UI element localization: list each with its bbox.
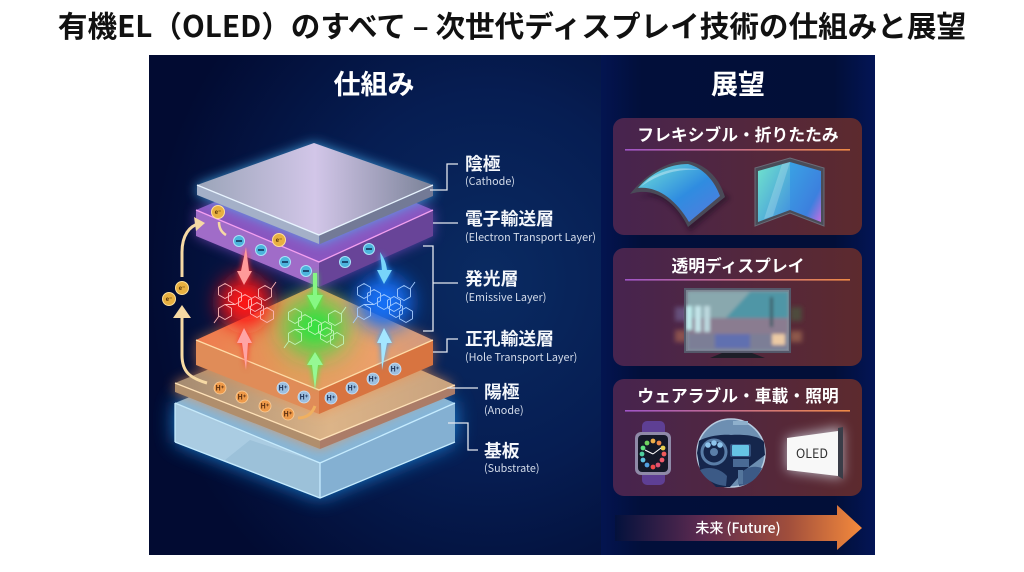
icon: car dashboard	[697, 419, 765, 487]
card heading: 透明ディスプレイ	[671, 253, 805, 277]
arrow: future: 未来 (Future)	[695, 518, 781, 538]
arrow: green up	[307, 352, 323, 390]
label: anode: 陽極	[484, 378, 520, 404]
icon: OLED lighting panel	[787, 427, 843, 479]
panel: outlook background	[601, 55, 875, 555]
label: emissive layer	[465, 265, 546, 305]
holes: blue: H⁺	[348, 384, 357, 394]
arrow: blue up	[377, 328, 392, 370]
layer: substrate	[175, 345, 455, 498]
arrow: electron into layer	[219, 222, 226, 235]
card heading: ウェアラブル・車載・照明	[637, 383, 839, 407]
arrow: hole into layer	[298, 406, 315, 418]
icon: foldable device	[755, 158, 824, 226]
layer stack diagram	[162, 143, 455, 498]
holes: orange: H⁺	[238, 392, 247, 402]
label: hole transport layer: (Hole Transport Layer)	[465, 349, 577, 365]
holes: blue: H⁺	[326, 394, 336, 404]
arrow: red up	[237, 328, 252, 370]
label: anode	[484, 378, 524, 418]
icon: smartwatch	[635, 421, 671, 485]
electron particles	[162, 206, 286, 306]
arrowhead: electron path upper	[194, 217, 205, 231]
holes: orange: H⁺	[260, 402, 270, 412]
arrow: blue down	[377, 252, 392, 284]
electron particles: e⁻	[166, 294, 172, 303]
holes: blue: H⁺	[390, 364, 400, 374]
label: emissive layer: 発光層	[465, 265, 518, 291]
holes: blue	[277, 363, 401, 404]
label: electron transport layer: 電子輸送層	[465, 205, 554, 231]
leader lines	[423, 164, 478, 450]
electron particles: e⁻	[215, 207, 221, 216]
label: substrate: (Substrate)	[484, 460, 540, 476]
electron particles: e⁻	[179, 283, 185, 292]
panel: transparent display	[613, 248, 862, 366]
label: substrate	[484, 437, 540, 476]
label: hole transport layer	[465, 325, 577, 365]
layer: hole transport layer	[196, 286, 433, 414]
panel: mechanism background	[149, 55, 601, 555]
molecule: red	[214, 282, 276, 323]
label: hole transport layer: 正孔輸送層	[465, 325, 554, 351]
holes: blue: H⁺	[300, 392, 309, 402]
arrow: future	[615, 505, 862, 550]
heading: mechanism: 仕組み	[334, 63, 414, 102]
layer: electron transport layer	[196, 160, 433, 287]
label: electron transport layer	[465, 205, 596, 245]
holes: orange: H⁺	[216, 384, 225, 394]
label: cathode: 陰極	[465, 150, 501, 176]
emissive glows	[219, 275, 412, 353]
arrow: green down	[307, 273, 323, 310]
panel: flexible and foldable	[613, 118, 862, 235]
molecule: blue	[353, 282, 415, 323]
molecule: green	[284, 307, 346, 348]
card heading: フレキシブル・折りたたみ	[637, 122, 839, 146]
holes: blue: H⁺	[278, 384, 288, 394]
label: emissive layer: (Emissive Layer)	[465, 289, 546, 305]
layer: cathode	[197, 143, 433, 244]
label: cathode: (Cathode)	[465, 173, 515, 189]
negative charges	[234, 236, 374, 276]
label: anode: (Anode)	[484, 402, 524, 418]
arrow: electron path from anode upward	[182, 224, 207, 383]
holes: orange: H⁺	[284, 410, 293, 420]
label: cathode	[465, 150, 515, 189]
holes: orange	[214, 382, 294, 420]
icon: OLED lighting panel: OLED	[796, 443, 828, 462]
label: electron transport layer: (Electron Transport Layer)	[465, 229, 596, 245]
heading: outlook: 展望	[711, 63, 765, 102]
holes: blue: H⁺	[368, 374, 378, 384]
layer: anode	[175, 325, 455, 449]
arrow: red down	[237, 247, 252, 285]
arrowhead: electron path lower	[173, 305, 191, 318]
icon: transparent TV	[675, 289, 802, 358]
label: substrate: 基板	[484, 437, 520, 463]
title: 有機EL（OLED）のすべて – 次世代ディスプレイ技術の仕組みと展望	[58, 3, 966, 46]
icon: flexible screen	[630, 161, 730, 232]
panel: wearable, automotive, lighting	[613, 379, 862, 496]
electron particles: e⁻	[276, 235, 282, 244]
